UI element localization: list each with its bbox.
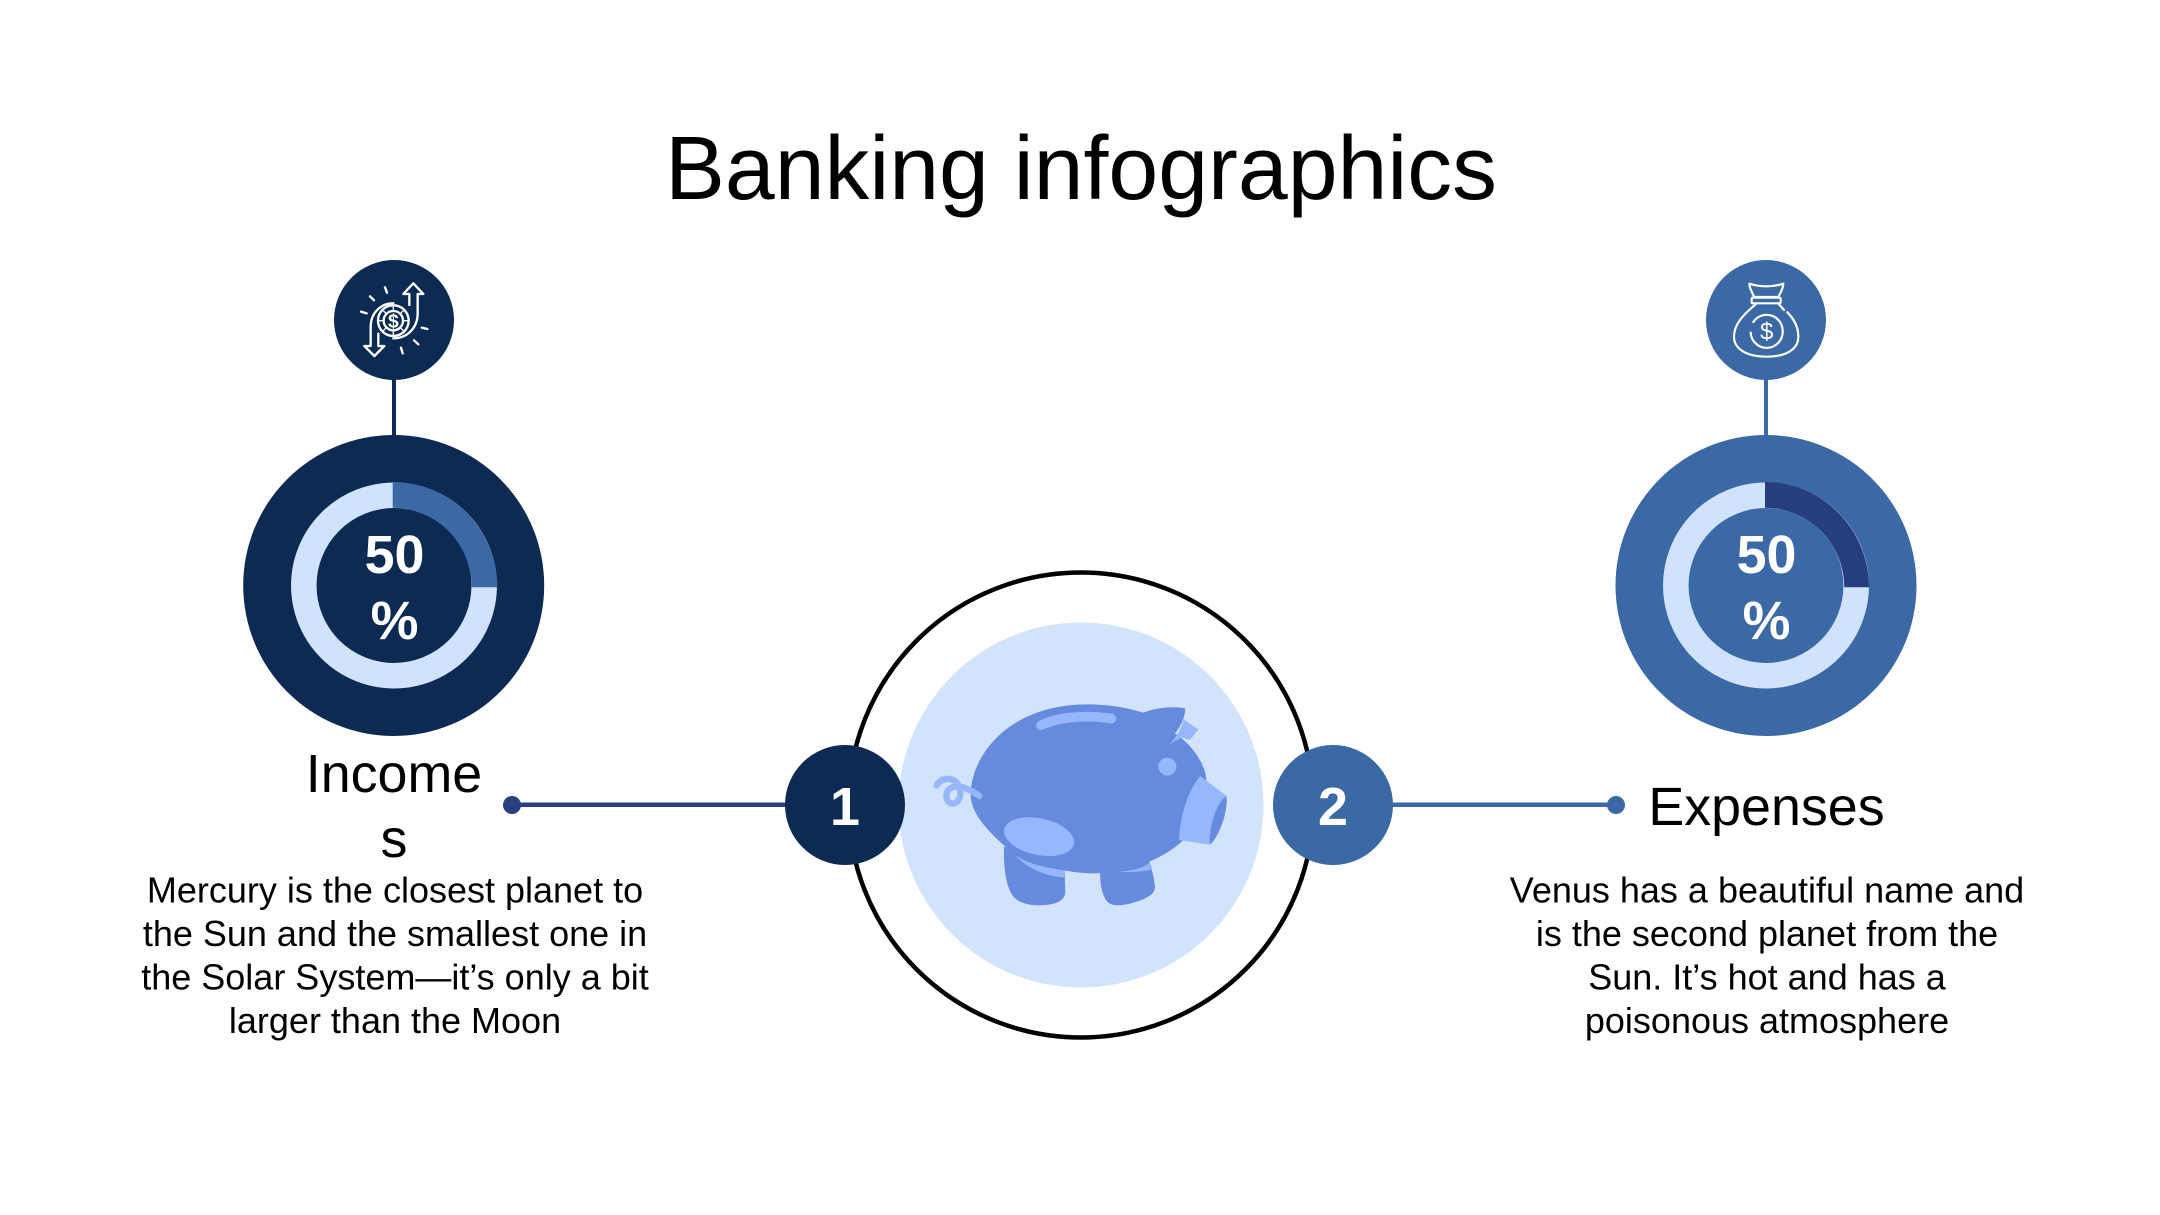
text block: mercury: [141, 870, 649, 1041]
inner light circle: [898, 622, 1264, 988]
step badge 1: [785, 745, 905, 865]
text block: venus: Sun. It’s hot and has a: [1588, 956, 1947, 998]
text block: mercury: larger than the Moon: [229, 1000, 561, 1041]
step badge 2: 2: [1318, 777, 1348, 837]
icon connector line: income: [392, 375, 396, 440]
text block: venus: poisonous atmosphere: [1585, 1000, 1949, 1041]
step badge 2: [1273, 745, 1393, 865]
text block: mercury: Mercury is the closest planet to: [147, 870, 643, 910]
panel: expenses: [1510, 260, 2024, 1041]
text block: venus: [1510, 870, 2024, 1041]
icon connector line: expenses: [1764, 375, 1768, 440]
icon: piggy bank: [937, 704, 1227, 905]
donut chart: expenses 50%: 50: [1737, 525, 1796, 585]
heading: incomes: s: [381, 809, 407, 869]
donut chart: income 50%: [243, 435, 544, 736]
icon: money flow: $: [388, 312, 399, 333]
connector line: step 2: [1388, 796, 1625, 814]
text block: venus: is the second planet from the: [1536, 913, 1998, 954]
step badge 1: 1: [830, 777, 860, 837]
text block: mercury: the Solar System—it’s only a bit: [141, 956, 649, 998]
icon: money flow: [334, 260, 454, 380]
donut chart: expenses 50%: [1616, 435, 1916, 736]
icon: money bag: [1706, 260, 1826, 380]
donut chart: expenses 50%: %: [1743, 591, 1790, 651]
title: Banking infographics: [665, 118, 1497, 218]
donut chart: income 50%: 50: [365, 525, 424, 585]
connector line: step 1: [503, 796, 792, 814]
text block: venus: Venus has a beautiful name and: [1510, 870, 2024, 910]
heading: expenses: Expenses: [1648, 777, 1885, 837]
donut chart: income 50%: %: [371, 591, 418, 651]
heading: incomes: [306, 744, 482, 869]
panel: income: [141, 260, 649, 1041]
icon: money bag: $: [1760, 319, 1773, 346]
text block: mercury: the Sun and the smallest one in: [143, 913, 647, 954]
heading: incomes: Income: [306, 744, 482, 804]
outer ring: [848, 572, 1314, 1038]
